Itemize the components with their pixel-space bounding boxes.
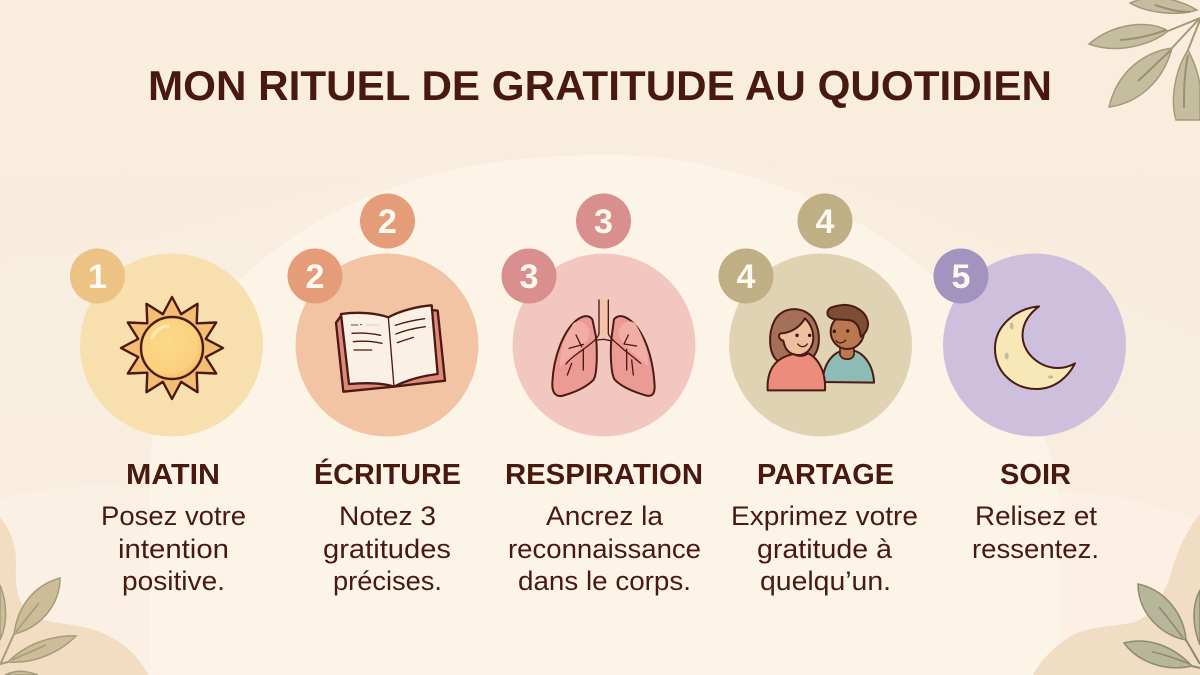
- badge: 3 side: [502, 248, 556, 304]
- step 1: matin: [70, 248, 263, 596]
- circle: partage: [729, 254, 912, 436]
- badge: 4 side: [718, 248, 774, 304]
- description: respiration: [508, 501, 701, 596]
- step 3: respiration: [502, 194, 703, 596]
- description: matin: [101, 501, 246, 596]
- label: matin: MATIN: [126, 459, 220, 491]
- description: matin: Posez votre: [101, 501, 246, 531]
- badge: 2 side: 2: [306, 258, 324, 296]
- label: partage: PARTAGE: [757, 459, 894, 491]
- circle: soir: [943, 254, 1126, 436]
- badge: 3 top: [576, 194, 631, 248]
- badge: 3 top: 3: [594, 203, 613, 241]
- description: ecriture: [323, 501, 451, 596]
- description: ecriture: précises.: [333, 566, 442, 596]
- description: soir: ressentez.: [972, 534, 1099, 564]
- decorative blob: bottom left: [0, 518, 148, 675]
- description: partage: quelqu’un.: [760, 566, 891, 596]
- circle: respiration: [512, 254, 696, 436]
- description: respiration: dans le corps.: [518, 566, 691, 596]
- label: soir: SOIR: [1000, 459, 1071, 491]
- step 2: ecriture: [288, 194, 478, 596]
- decorative blob: bottom right: [1033, 514, 1200, 675]
- step 5: soir: [934, 248, 1126, 564]
- badge: 5: 5: [952, 258, 970, 296]
- description: respiration: Ancrez la: [546, 501, 664, 531]
- badge: 1: 1: [88, 258, 107, 296]
- leaves: bottom right: [1124, 584, 1200, 668]
- icon: open book: [336, 305, 445, 392]
- icon: sun: [121, 297, 223, 399]
- description: respiration: reconnaissance: [508, 534, 701, 564]
- description: partage: gratitude à: [757, 534, 893, 564]
- description: partage: Exprimez votre: [731, 501, 918, 531]
- description: ecriture: gratitudes: [323, 534, 451, 564]
- badge: 3 side: 3: [520, 258, 538, 296]
- circle: matin: [80, 254, 263, 436]
- badge: 4 top: 4: [816, 203, 835, 241]
- badge: 5: [934, 248, 988, 304]
- badge: 1: [70, 248, 125, 304]
- description: soir: [972, 501, 1099, 564]
- icon: crescent moon: [995, 306, 1075, 389]
- description: matin: positive.: [122, 566, 225, 596]
- icon: lungs: [552, 300, 655, 396]
- title: MON RITUEL DE GRATITUDE AU QUOTIDIEN: [148, 62, 1052, 109]
- label: respiration: RESPIRATION: [505, 459, 703, 491]
- badge: 2 top: [360, 194, 415, 248]
- description: matin: intention: [118, 534, 229, 564]
- leaves: bottom left: [0, 578, 76, 675]
- description: partage: [731, 501, 918, 596]
- leaves: top right: [1089, 0, 1200, 120]
- badge: 2 side: [288, 248, 342, 304]
- icon: two people: [768, 305, 874, 390]
- circle: ecriture: [296, 254, 478, 436]
- badge: 2 top: 2: [378, 203, 397, 241]
- description: ecriture: Notez 3: [339, 501, 436, 531]
- description: soir: Relisez et: [975, 501, 1098, 531]
- badge: 4 top: [798, 194, 852, 248]
- badge: 4 side: 4: [737, 258, 756, 296]
- label: ecriture: ÉCRITURE: [314, 457, 461, 491]
- step 4: partage: [718, 194, 918, 596]
